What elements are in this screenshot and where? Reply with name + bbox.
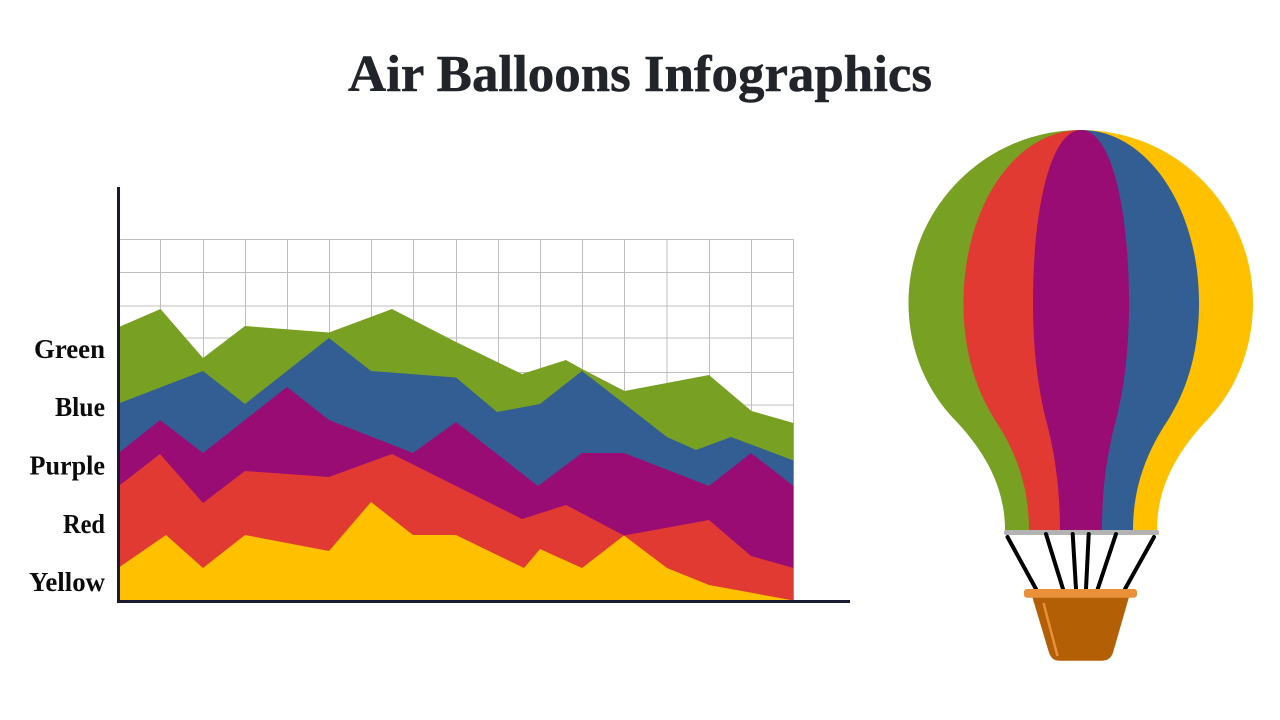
chart grid bbox=[120, 240, 794, 600]
label: blue: Blue bbox=[55, 392, 105, 422]
basket rim bbox=[1024, 589, 1137, 598]
basket bbox=[1032, 597, 1129, 661]
area: purple bbox=[120, 387, 794, 600]
balloon panel: blue bbox=[1081, 130, 1199, 530]
stacked area chart bbox=[118, 187, 850, 602]
axis labels bbox=[29, 334, 105, 597]
balloon ring bbox=[1004, 530, 1159, 535]
balloon panel: yellow bbox=[1081, 130, 1253, 530]
basket highlight bbox=[1044, 603, 1058, 656]
area: green bbox=[120, 309, 794, 600]
area: blue bbox=[120, 338, 794, 600]
balloon panel: green bbox=[908, 130, 1081, 530]
axes bbox=[118, 187, 850, 602]
ropes bbox=[1008, 534, 1154, 589]
hot air balloon bbox=[908, 130, 1253, 661]
title: Air Balloons Infographics bbox=[348, 46, 932, 103]
area: red bbox=[120, 454, 794, 600]
area: yellow bbox=[120, 502, 794, 600]
label: purple: Purple bbox=[30, 450, 105, 480]
balloon panel: red bbox=[964, 130, 1081, 530]
label: red: Red bbox=[63, 509, 105, 539]
label: green: Green bbox=[34, 334, 105, 364]
label: yellow: Yellow bbox=[29, 567, 105, 597]
balloon panel: purple bbox=[1033, 130, 1129, 530]
